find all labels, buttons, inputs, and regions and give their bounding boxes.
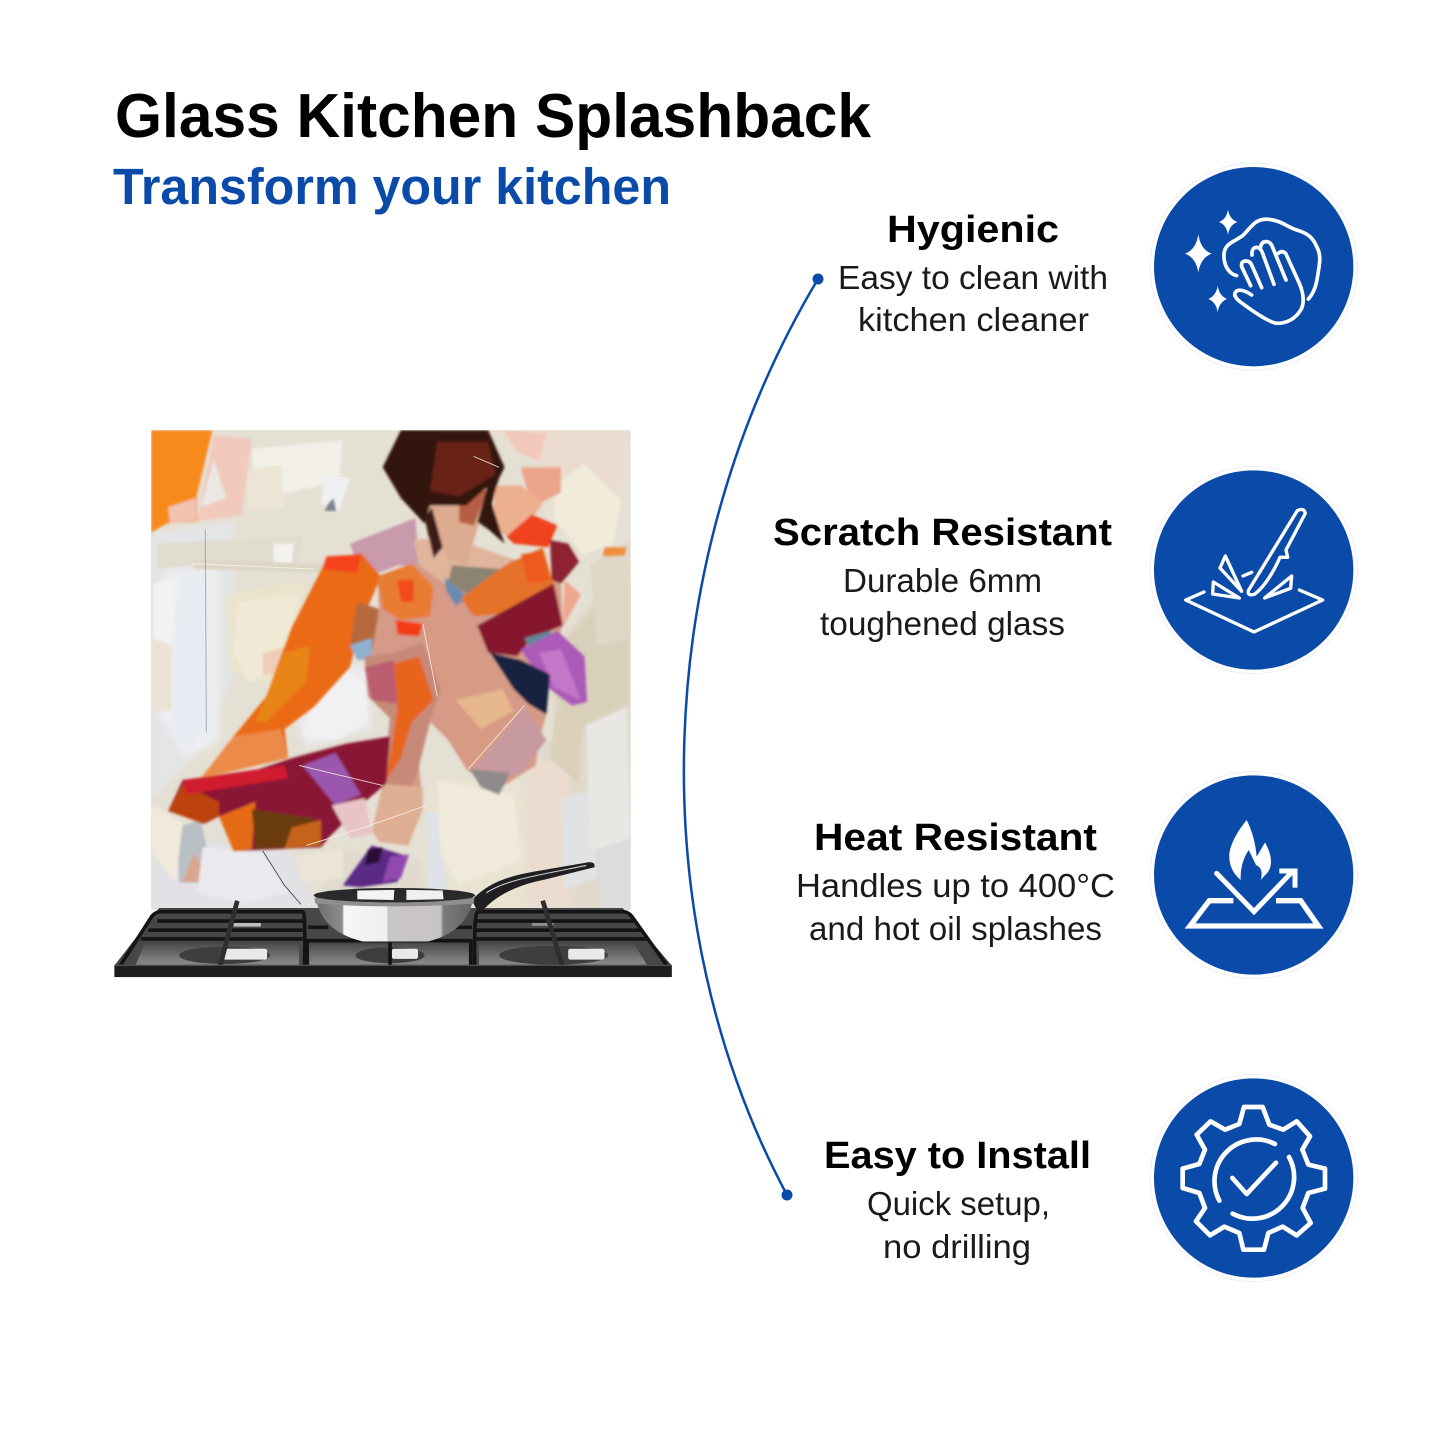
- orange corner: [151, 430, 213, 533]
- icon: knife scratching glass: [1150, 466, 1357, 674]
- canvas scratches: [192, 456, 525, 845]
- gas hob: [114, 901, 672, 977]
- feature text: Hygienic: [838, 209, 1108, 338]
- near thigh: [423, 576, 539, 791]
- grates: [119, 901, 668, 967]
- product image: splashback above hob: [114, 430, 672, 977]
- figure silhouette: [365, 540, 563, 845]
- icon: flame over heat-resistant surface: [1150, 771, 1357, 979]
- subtitle: Transform your kitchen: [113, 158, 671, 215]
- feature text: Scratch Resistant: Durable 6mm: [843, 562, 1042, 599]
- purple shoe: [343, 845, 408, 887]
- hob front edge: [114, 965, 672, 977]
- torso skin: [414, 536, 510, 584]
- face and neck: [426, 503, 484, 564]
- feature text: Heat Resistant: Handles up to 400°C: [796, 867, 1115, 904]
- pink shoulder drape: [350, 518, 419, 573]
- hob glass panels: [135, 944, 647, 965]
- shoulder and arm: [492, 485, 543, 540]
- feature text: Easy to Install: Quick setup,: [867, 1185, 1050, 1222]
- feature text: Heat Resistant: [796, 817, 1115, 947]
- feature text: Heat Resistant: Heat Resistant: [814, 817, 1097, 859]
- burners: [179, 923, 608, 965]
- feature text: Scratch Resistant: toughened glass: [820, 605, 1065, 642]
- feature text: Heat Resistant: and hot oil splashes: [809, 910, 1102, 947]
- pan handle: [472, 862, 595, 915]
- icon: hand wiping with sparkles: [1150, 163, 1357, 370]
- frying pan: [314, 862, 595, 941]
- hair: [383, 430, 505, 524]
- feature text: Easy to Install: [824, 1135, 1091, 1265]
- icon: gear with check mark: [1150, 1074, 1357, 1282]
- feature text: Scratch Resistant: Scratch Resistant: [773, 512, 1112, 554]
- feature text: Easy to Install: no drilling: [883, 1228, 1031, 1265]
- rear orange leg: [232, 552, 381, 758]
- feature text: Hygienic: Easy to clean with: [838, 259, 1108, 296]
- feature text: Hygienic: Hygienic: [887, 209, 1059, 251]
- feature text: Scratch Resistant: [773, 512, 1112, 642]
- visible brush strokes: [152, 440, 631, 907]
- abstract painting: [151, 430, 631, 910]
- feature text: Hygienic: kitchen cleaner: [858, 301, 1089, 338]
- feature text: Easy to Install: Easy to Install: [824, 1135, 1091, 1177]
- lower shin: [365, 642, 441, 798]
- navy skirt: [490, 653, 550, 715]
- maroon cloth: [168, 736, 390, 851]
- connecting arc with end dots: [684, 274, 824, 1200]
- title: Glass Kitchen Splashback: [115, 82, 871, 151]
- purple panel: [521, 631, 587, 705]
- red dress: [477, 584, 563, 656]
